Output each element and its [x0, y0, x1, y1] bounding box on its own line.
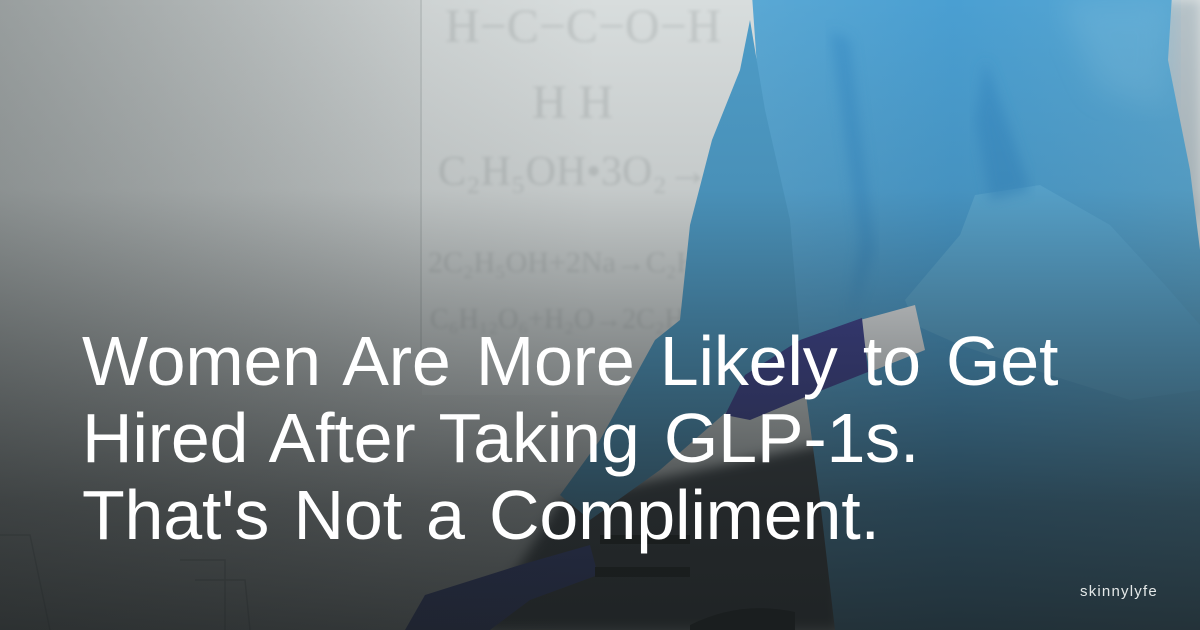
whiteboard with faint formulas: C₂H₅OH•3O₂→2C — [438, 149, 758, 195]
whiteboard with faint formulas: H−C−C−O−H — [445, 0, 721, 53]
whiteboard with faint formulas — [421, 0, 765, 395]
lower hand in purple glove — [405, 545, 598, 630]
whiteboard with faint formulas: 2C₂H₅OH+2Na→C₂H₅ONa — [428, 246, 765, 279]
glassware — [0, 535, 250, 630]
whiteboard with faint formulas: H H — [532, 76, 613, 129]
title: That's Not a Compliment. — [82, 476, 880, 554]
brand label: skinnylyfe — [1080, 583, 1158, 600]
lab bench — [480, 440, 840, 630]
blue gown — [560, 0, 1200, 630]
title — [82, 322, 1058, 554]
whiteboard with faint formulas: C₆H₁₂O₆+H₂O→2C₂H₅ — [430, 304, 695, 335]
bench equipment — [595, 535, 795, 630]
title: Hired After Taking GLP-1s. — [82, 399, 919, 477]
far right background — [1160, 0, 1200, 220]
title: Women Are More Likely to Get — [82, 322, 1058, 400]
arm: white cuff and purple glove — [725, 305, 925, 420]
